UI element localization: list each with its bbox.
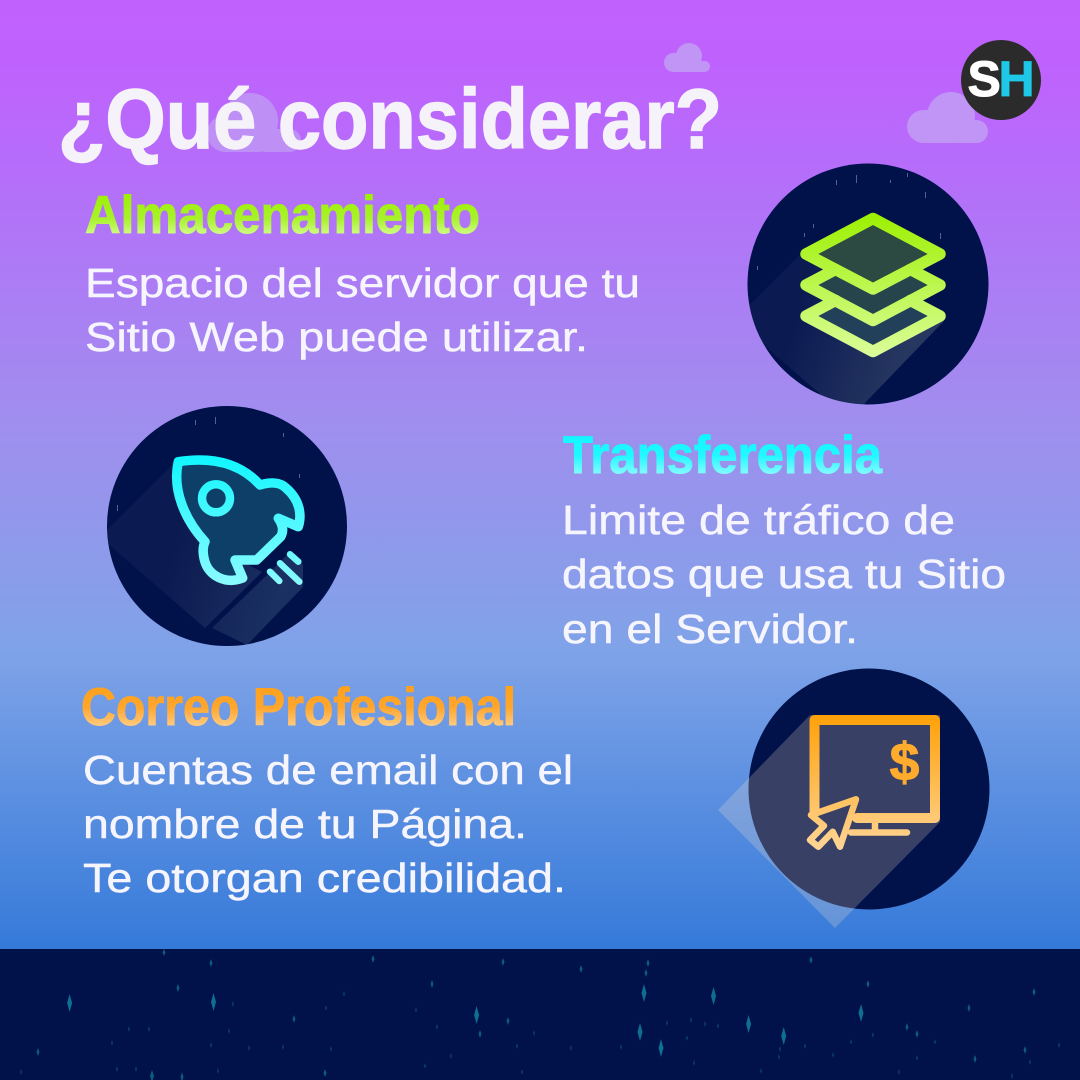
- panel: correo profesional text: [81, 678, 573, 901]
- text: correo description: [83, 747, 573, 901]
- text: almacenamiento description: [85, 260, 640, 360]
- icon: stacked layers: [748, 164, 988, 404]
- footer starry band: [0, 949, 1080, 1080]
- text: correo description: Te otorgan credibilidad.: [83, 855, 566, 901]
- heading: correo profesional: Correo Profesional: [81, 678, 516, 737]
- logo: SH badge: H: [998, 51, 1035, 107]
- text: transferencia description: en el Servidor.: [562, 606, 858, 652]
- panel: transferencia text: [562, 426, 1006, 652]
- decorative cloud: large right: [907, 92, 988, 143]
- decorative cloud: behind title: [207, 93, 301, 152]
- decorative cloud: small top: [664, 43, 710, 72]
- panel: almacenamiento text: [85, 186, 640, 360]
- text: correo description: Cuentas de email con el: [83, 747, 573, 793]
- text: transferencia description: datos que usa tu Sitio: [562, 551, 1006, 597]
- icon: rocket: [100, 406, 347, 646]
- icon: monitor with dollar and cursor: $: [890, 733, 919, 792]
- title: ¿Qué considerar?: [58, 72, 722, 166]
- text: correo description: nombre de tu Página.: [83, 801, 527, 847]
- heading: transferencia: Transferencia: [563, 426, 882, 485]
- logo: SH badge: [961, 40, 1041, 120]
- text: transferencia description: Limite de tráfico de: [562, 497, 955, 543]
- logo: SH badge: S: [968, 51, 1001, 107]
- heading: almacenamiento: Almacenamiento: [85, 186, 480, 245]
- text: almacenamiento description: Sitio Web puede utilizar.: [85, 314, 588, 360]
- icon: monitor with dollar and cursor: [718, 668, 990, 928]
- text: almacenamiento description: Espacio del servidor que tu: [85, 260, 640, 306]
- text: transferencia description: [562, 497, 1006, 652]
